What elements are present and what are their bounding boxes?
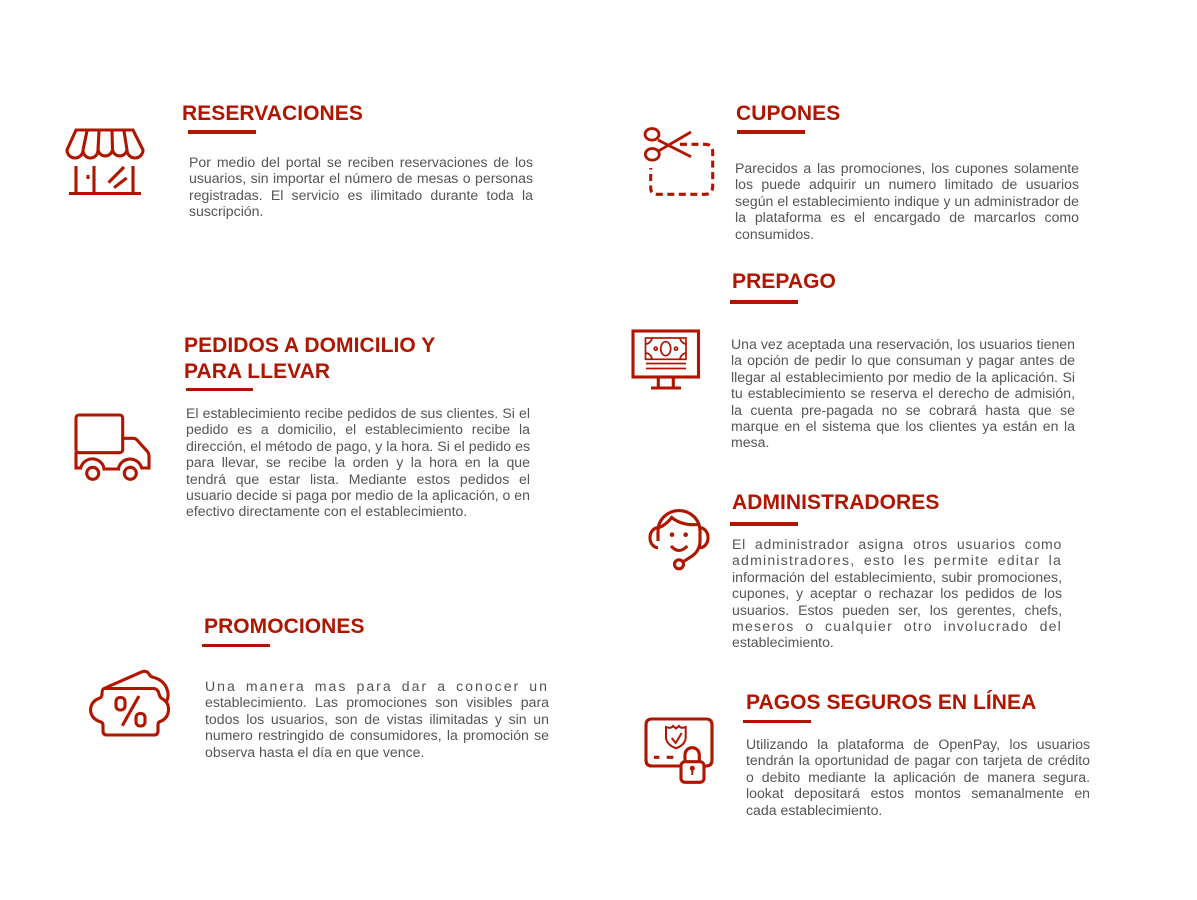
heading: promociones: PROMOCIONES bbox=[204, 615, 365, 638]
text block: Utilizando la plataforma de OpenPay, los usuarios bbox=[746, 736, 1090, 752]
text block: El establecimiento recibe pedidos de sus clientes. Si el bbox=[186, 405, 530, 421]
text block: según el establecimiento indique y un administrador de bbox=[735, 193, 1079, 209]
text block: observa hasta el día en que vence. bbox=[205, 744, 424, 760]
heading: prepago: PREPAGO bbox=[732, 270, 836, 293]
panel: prepago bbox=[631, 270, 1075, 450]
text block bbox=[186, 405, 530, 519]
heading underline bbox=[186, 388, 253, 391]
text block: usuarios. Estos pueden ser, los gerentes, chefs, bbox=[732, 602, 1062, 618]
text block: Una manera mas para dar a conocer un bbox=[205, 678, 549, 694]
text block bbox=[731, 336, 1075, 450]
text block: mesa. bbox=[731, 434, 769, 450]
text block: la cuenta pre-pagada no se cobrará hasta que se bbox=[731, 402, 1075, 418]
text block bbox=[746, 736, 1090, 818]
text block: Una vez aceptada una reservación, los usuarios tienen bbox=[731, 336, 1075, 352]
heading underline bbox=[202, 644, 270, 647]
icon: storefront bbox=[65, 128, 145, 195]
text block: usuarios, sin importar el número de mesas o personas bbox=[189, 170, 533, 186]
panel: reservaciones bbox=[65, 102, 533, 219]
panel: pedidos a domicilio bbox=[74, 334, 530, 519]
text block: tendrán la oportunidad de pagar con tarjeta de crédito bbox=[746, 752, 1090, 768]
heading underline bbox=[737, 130, 805, 134]
text block: información del establecimiento, subir promociones, bbox=[732, 569, 1062, 585]
text block: suscripción. bbox=[189, 203, 263, 219]
heading: pagos seguros: PAGOS SEGUROS EN LÍNEA bbox=[746, 691, 1036, 714]
panel: promociones bbox=[88, 615, 549, 760]
text block: consumidos. bbox=[735, 226, 814, 242]
text block: tendrá que estar lista. Mediante estos pedidos el bbox=[186, 471, 530, 487]
text block: tu establecimiento se reserva el derecho de admisión, bbox=[731, 385, 1075, 401]
text block: registradas. El servicio es ilimitado durante toda la bbox=[189, 187, 533, 203]
icon: delivery truck bbox=[74, 414, 151, 481]
text block: lookat depositará estos montos semanalmente en bbox=[746, 785, 1090, 801]
heading: reservaciones: RESERVACIONES bbox=[182, 102, 363, 125]
text block: administradores, esto les permite editar la bbox=[732, 552, 1062, 568]
text block: dirección, el método de pago, y la hora. Si el pedido es bbox=[186, 438, 530, 454]
text block bbox=[732, 536, 1062, 650]
icon: percent coupon bbox=[88, 670, 170, 736]
icon: scissors coupon bbox=[644, 127, 714, 196]
text block bbox=[205, 678, 549, 760]
text block: pedido es a domicilio, el establecimiento recibe la bbox=[186, 421, 530, 437]
panel: cupones bbox=[644, 102, 1079, 242]
panel: administradores bbox=[648, 491, 1062, 650]
text block: o debito mediante la aplicación de manera segura. bbox=[746, 769, 1090, 785]
icon: secure card with lock bbox=[644, 718, 714, 784]
text block: cupones, y aceptar o rechazar los pedidos de los bbox=[732, 585, 1062, 601]
heading: pedidos: PARA LLEVAR bbox=[184, 360, 330, 383]
heading: cupones: CUPONES bbox=[736, 102, 840, 125]
heading: pedidos: PEDIDOS A DOMICILIO Y bbox=[184, 334, 435, 357]
text block: la opción de pedir lo que consuman y pagar antes de bbox=[731, 352, 1075, 368]
text block: usuario decide si paga por medio de la aplicación, o en bbox=[186, 487, 530, 503]
text block: todos los usuarios, son de vistas ilimitadas y sin un bbox=[205, 711, 549, 727]
icon: monitor with banknote bbox=[631, 329, 700, 390]
heading: pedidos bbox=[184, 334, 435, 383]
text block: meseros o cualquier otro involucrado del bbox=[732, 618, 1062, 634]
text block bbox=[189, 154, 533, 219]
text block: Por medio del portal se reciben reservaciones de los bbox=[189, 154, 533, 170]
text block: El administrador asigna otros usuarios como bbox=[732, 536, 1062, 552]
text block: para llevar, se recibe la orden y la hora en la que bbox=[186, 454, 530, 470]
text block bbox=[735, 160, 1079, 242]
text block: la plataforma es el encargado de marcarlos como bbox=[735, 209, 1079, 225]
text block: Parecidos a las promociones, los cupones solamente bbox=[735, 160, 1079, 176]
text block: establecimiento. Las promociones son visibles para bbox=[205, 694, 549, 710]
text block: marque en el sistema que los clientes ya están en la bbox=[731, 418, 1075, 434]
heading: administradores: ADMINISTRADORES bbox=[732, 491, 939, 514]
heading underline bbox=[188, 130, 256, 134]
heading underline bbox=[730, 300, 798, 304]
heading underline bbox=[743, 720, 811, 723]
text block: establecimiento. bbox=[732, 634, 834, 650]
icon: support agent bbox=[648, 509, 710, 570]
text block: numero restringido de consumidores, la promoción se bbox=[205, 727, 549, 743]
text block: llegar al establecimiento por medio de la aplicación. Si bbox=[731, 369, 1075, 385]
panel: pagos seguros bbox=[644, 690, 1090, 818]
heading underline bbox=[730, 522, 798, 526]
text block: cada establecimiento. bbox=[746, 802, 882, 818]
text block: los puede adquirir un numero limitado de usuarios bbox=[735, 176, 1079, 192]
text block: efectivo directamente con el establecimiento. bbox=[186, 503, 467, 519]
